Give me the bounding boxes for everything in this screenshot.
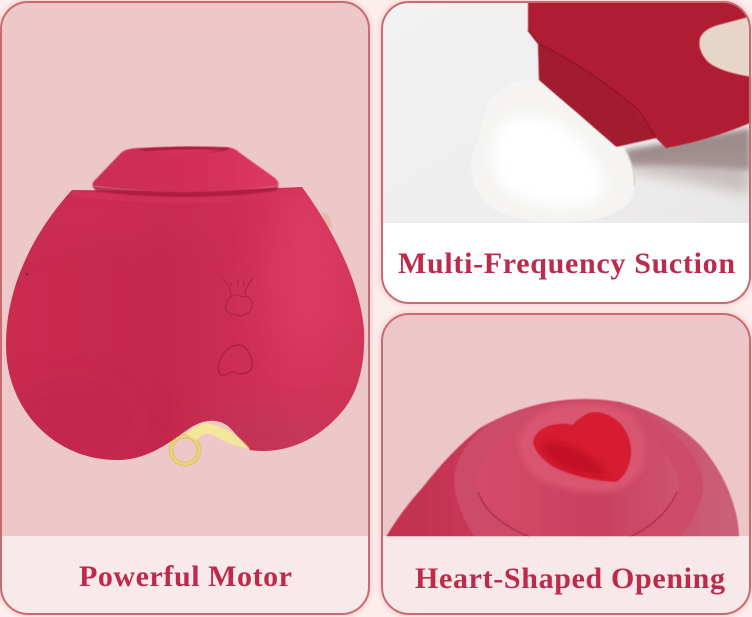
photo backdrop bbox=[382, 2, 750, 223]
caption band bbox=[382, 536, 750, 614]
panel: multi-frequency suction bbox=[382, 2, 752, 303]
device: heart-shaped body bbox=[0, 147, 370, 465]
caption: Multi-Frequency Suction bbox=[398, 247, 735, 280]
panel: powerful motor bbox=[0, 2, 370, 614]
panel: heart-shaped opening bbox=[382, 314, 750, 614]
icon: suction symbol bbox=[222, 276, 253, 316]
caption band bbox=[1, 536, 369, 614]
cone top lip bbox=[518, 404, 645, 492]
icon: heart button bbox=[218, 345, 252, 375]
raised cone bbox=[560, 482, 678, 536]
side button bbox=[322, 212, 332, 228]
rim shadow bbox=[92, 186, 279, 197]
small hole bbox=[26, 273, 28, 275]
caption: Heart-Shaped Opening bbox=[415, 562, 725, 595]
device: body top bbox=[386, 399, 739, 537]
cone opening bbox=[138, 147, 230, 153]
heart opening bbox=[533, 412, 631, 482]
rim highlight bbox=[76, 192, 194, 203]
device shadow bbox=[625, 128, 750, 170]
finger bbox=[699, 16, 752, 77]
caption band bbox=[382, 223, 750, 303]
device: red body bbox=[528, 2, 750, 148]
gold ring pendant bbox=[171, 436, 199, 464]
caption: Powerful Motor bbox=[79, 560, 292, 593]
base ring bbox=[454, 401, 703, 537]
gold clip bbox=[186, 423, 250, 449]
top cone bbox=[92, 147, 279, 192]
white gel mound bbox=[538, 80, 634, 220]
